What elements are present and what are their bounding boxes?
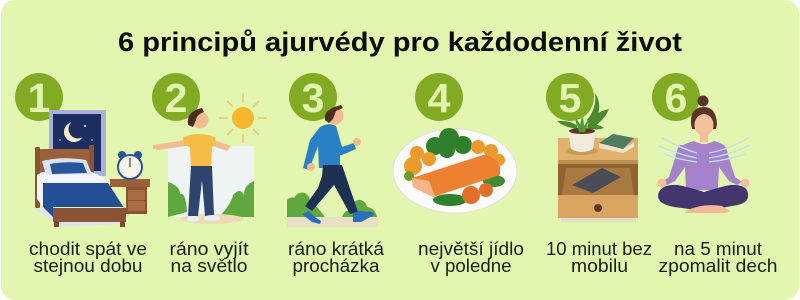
caption 5: 10 minut bez — [546, 238, 652, 259]
title: 6 principů ajurvédy pro každodenní život — [118, 27, 682, 57]
number badge 6 — [652, 73, 700, 121]
caption 1: stejnou dobu — [34, 255, 142, 276]
icon: salmon plate — [393, 128, 517, 213]
icon: outdoor scene — [168, 146, 254, 224]
principle 2: morning light — [152, 73, 267, 276]
number badge 2 — [152, 73, 200, 121]
icon: walking man in hoodie — [302, 105, 374, 224]
icon: book — [599, 134, 634, 153]
principle 5: phone-free — [546, 73, 652, 276]
icon: night window — [49, 110, 106, 176]
caption 2: ráno vyjít — [170, 238, 248, 259]
icon: breath lines — [659, 137, 750, 162]
icon: meditating woman — [658, 96, 750, 213]
caption 1: chodit spát ve — [29, 238, 147, 259]
caption 1 — [29, 238, 147, 276]
caption 6: zpomalit dech — [658, 255, 778, 276]
number badge 5: 5 — [559, 75, 581, 121]
principle 6: breathing — [652, 73, 778, 276]
icon: ground and shrubs — [287, 193, 378, 227]
caption 5: mobilu — [571, 255, 628, 276]
icon: plant leaves — [557, 93, 609, 131]
number badge 5 — [546, 73, 594, 121]
caption 3 — [288, 238, 385, 276]
icon: nightstand and alarm clock — [110, 151, 150, 214]
number badge 1 — [15, 73, 63, 121]
number badge 3 — [289, 73, 337, 121]
principle 3: walk — [287, 73, 385, 276]
number badge 3: 3 — [302, 75, 324, 121]
caption 4 — [418, 238, 524, 276]
icon: plant pot — [566, 116, 598, 155]
icon: sun — [219, 93, 267, 143]
number badge 1: 1 — [28, 75, 50, 121]
caption 6: na 5 minut — [674, 238, 762, 259]
number badge 6: 6 — [665, 75, 687, 121]
number badge 4 — [415, 73, 463, 121]
icon: bed — [33, 145, 130, 227]
principle 1: sleep — [15, 73, 150, 276]
caption 4: v poledne — [430, 255, 512, 276]
icon: man with open arms — [153, 108, 231, 222]
caption 6 — [658, 238, 778, 276]
caption 5 — [546, 238, 652, 276]
number badge 2: 2 — [165, 75, 187, 121]
icon: nightstand with open drawer — [558, 138, 638, 222]
caption 3: ráno krátká — [288, 238, 385, 259]
caption 3: procházka — [292, 255, 380, 276]
caption 2: na světlo — [170, 255, 248, 276]
number badge 4: 4 — [428, 75, 451, 121]
caption 4: největší jídlo — [418, 238, 524, 259]
principle 4: plate — [393, 73, 524, 276]
caption 2 — [170, 238, 248, 276]
